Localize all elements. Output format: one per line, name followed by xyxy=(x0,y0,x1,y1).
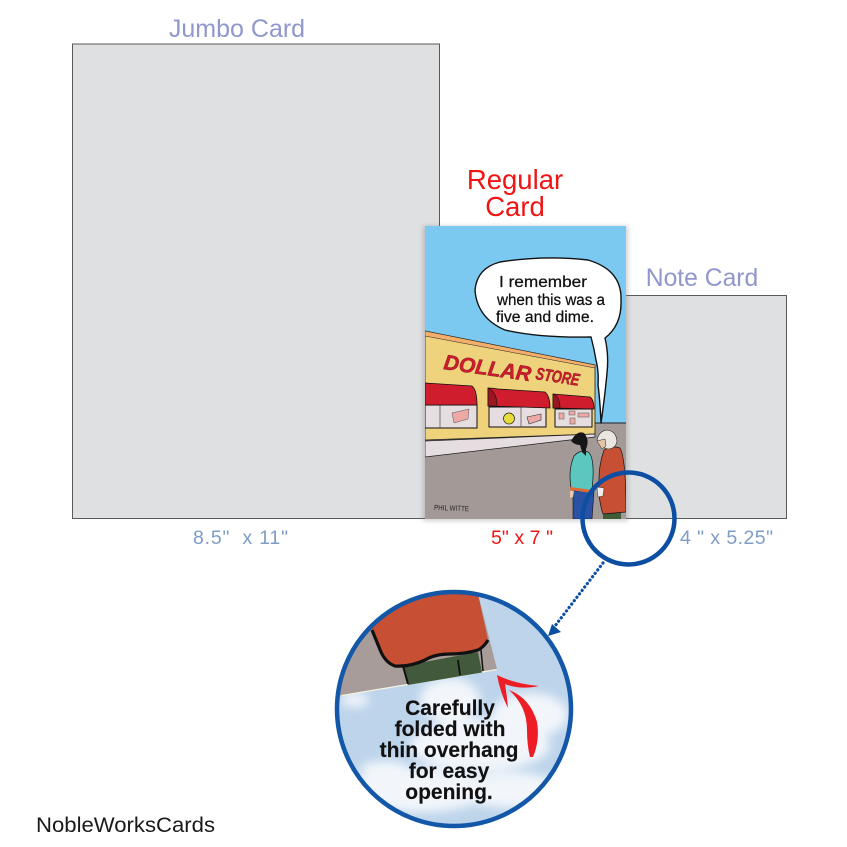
heading: regular card: Regular xyxy=(467,164,563,195)
card shadow xyxy=(423,226,628,521)
label: jumbo size: 8.5" x 11" xyxy=(193,527,288,549)
bubble text: I remember xyxy=(499,274,587,291)
label: note size: 4 " x 5.25" xyxy=(680,527,773,549)
red coat xyxy=(372,594,488,664)
sidewalk xyxy=(425,434,595,457)
callout text: thin overhang xyxy=(380,739,518,762)
sky background xyxy=(335,590,575,830)
heading: note card: Note Card xyxy=(646,265,758,292)
callout text: folded with xyxy=(395,718,505,741)
woman in teal xyxy=(570,432,594,519)
roof stripe xyxy=(425,331,595,368)
trousers xyxy=(403,652,482,685)
coat outline xyxy=(372,630,488,666)
magnified detail circle xyxy=(335,585,575,830)
heading: regular card second line: Card xyxy=(485,191,545,222)
fold edge xyxy=(342,670,497,696)
store building xyxy=(425,331,595,440)
callout text: opening. xyxy=(405,781,493,804)
bubble text line 2: when this was a xyxy=(496,292,605,309)
panel: note card xyxy=(620,296,786,518)
ground xyxy=(425,423,626,519)
small callout ring xyxy=(582,472,674,564)
signature: PHIL WITTE xyxy=(434,503,469,513)
panel: jumbo card xyxy=(72,44,440,518)
store sign: DOLLAR xyxy=(442,351,533,386)
clouds xyxy=(341,678,568,812)
illustration: regular card cartoon xyxy=(425,226,626,519)
left window and awning xyxy=(425,383,477,428)
man in red coat xyxy=(597,430,626,519)
speech bubble xyxy=(475,258,621,423)
store sign: STORE xyxy=(534,364,581,390)
sky xyxy=(425,226,626,422)
right window and awning xyxy=(553,394,594,427)
callout text xyxy=(380,697,518,804)
dotted pointer arrow xyxy=(548,563,603,636)
bubble text line 3: five and dime. xyxy=(496,309,594,326)
callout text: for easy xyxy=(409,760,490,783)
middle window and awning xyxy=(488,388,550,427)
callout text: Carefully xyxy=(405,697,495,720)
store sign xyxy=(443,354,581,386)
heading: jumbo card: Jumbo Card xyxy=(169,15,305,43)
label: regular size: 5" x 7 " xyxy=(491,527,553,549)
brand name: NobleWorksCards xyxy=(36,814,215,837)
red curved arrow xyxy=(497,675,539,757)
lens ring xyxy=(337,592,571,826)
folded card corner xyxy=(335,590,497,696)
